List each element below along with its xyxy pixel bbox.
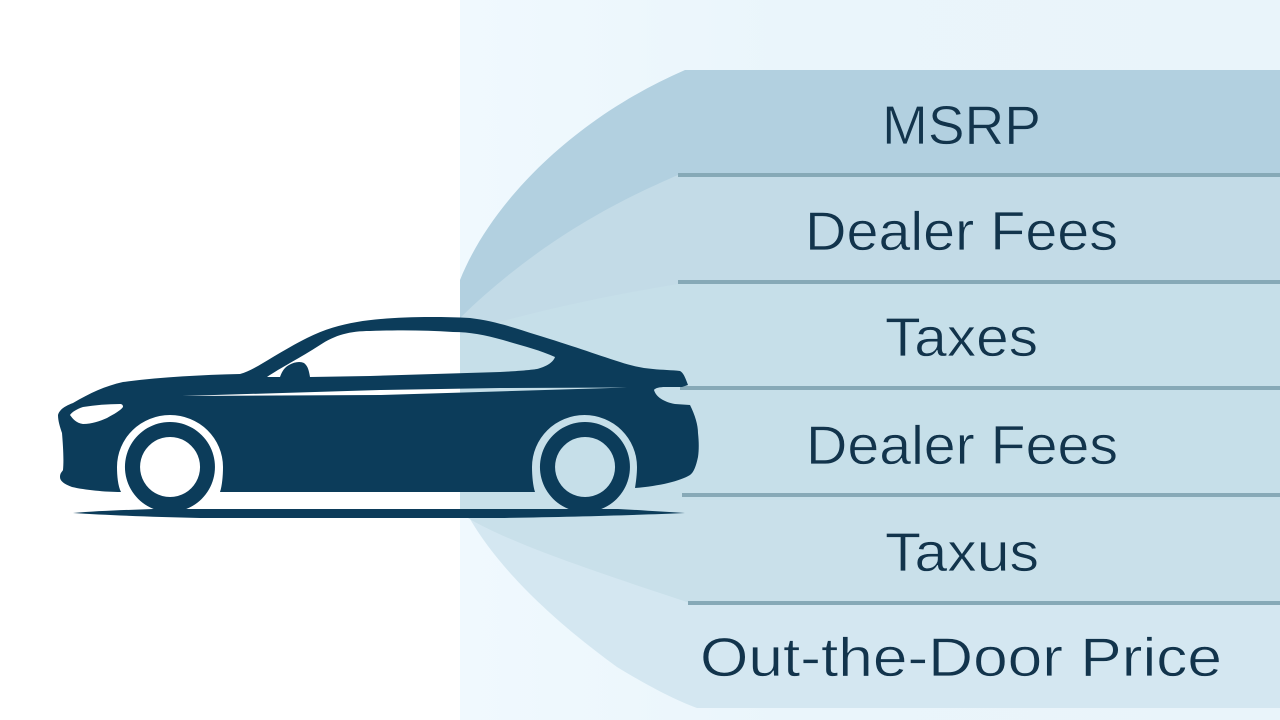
ground shadow <box>73 509 685 518</box>
front wheel <box>125 422 215 512</box>
band: taxes and lower rows <box>460 284 1280 500</box>
label: Taxus: Taxus <box>885 521 1039 583</box>
band: msrp <box>460 70 1280 318</box>
rear wheel <box>540 422 630 512</box>
price stack <box>460 70 1280 708</box>
label: Dealer Fees repeat: Dealer Fees <box>806 414 1118 476</box>
label: MSRP: MSRP <box>882 94 1041 156</box>
band: out-the-door price <box>460 500 1280 708</box>
background panel <box>460 0 1280 720</box>
label: Dealer Fees: Dealer Fees <box>805 200 1118 262</box>
row labels <box>700 94 1222 688</box>
label: Out-the-Door Price: Out-the-Door Price <box>700 626 1222 688</box>
icon: car silhouette <box>58 317 699 518</box>
band: dealer fees <box>460 165 1280 500</box>
label: Taxes: Taxes <box>885 306 1038 368</box>
car body <box>58 317 699 492</box>
band: taxus <box>460 400 1280 603</box>
row dividers <box>678 173 1280 605</box>
